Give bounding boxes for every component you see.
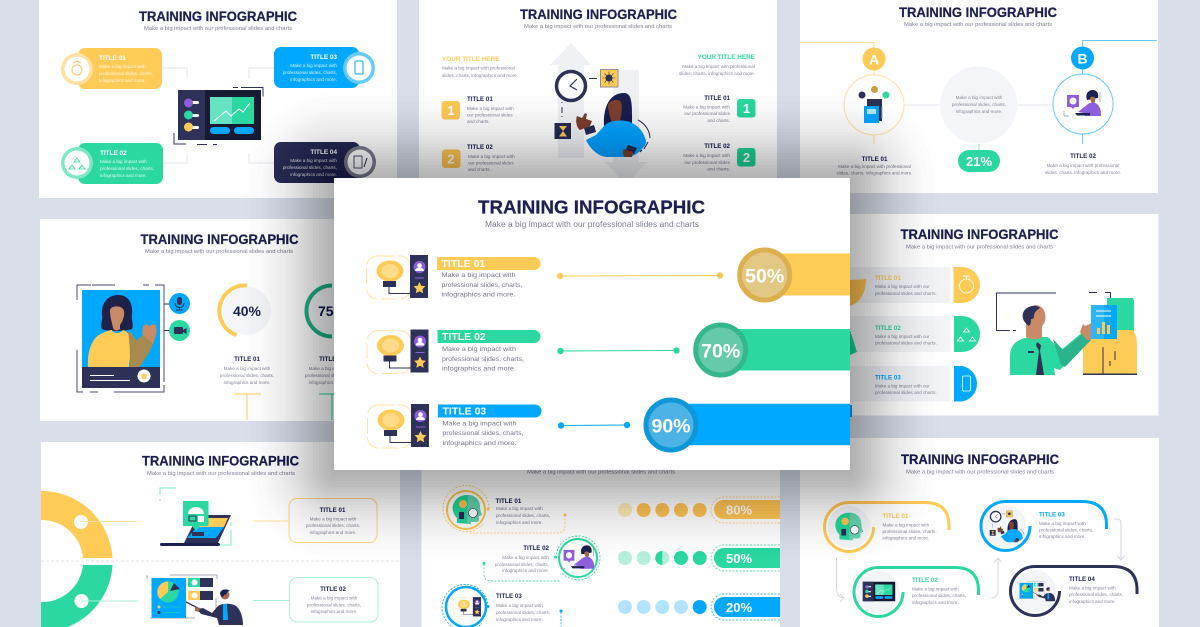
card: title 03: infographics and more.	[1039, 534, 1086, 539]
card: title 03: Make a big impact with	[1039, 521, 1086, 526]
card: title 02: TITLE 02	[912, 577, 938, 584]
row: title 01	[845, 267, 980, 303]
card: title 02: Make a big impact with	[100, 159, 147, 164]
icon: microphone	[164, 293, 190, 314]
subheading: Make a big impact with our professional slides and charts	[904, 22, 1052, 28]
left column: 1	[447, 103, 455, 118]
heading: TRAINING INFOGRAPHIC	[899, 5, 1057, 20]
card: title 01	[824, 502, 949, 552]
subheading: Make a big impact with our professional slides and charts	[524, 24, 672, 30]
subheading: Make a big impact with our professional slides and charts	[527, 470, 675, 476]
text: title 02: TITLE 02	[1070, 153, 1096, 160]
right column: our professional slides	[684, 111, 731, 116]
right column: 2	[743, 150, 750, 165]
heading: TRAINING INFOGRAPHIC	[900, 227, 1059, 242]
heading: TRAINING INFOGRAPHIC	[520, 7, 677, 22]
left column: TITLE 02	[467, 144, 493, 151]
right column: and charts.	[707, 166, 730, 172]
row: title 02: Make a big impact with	[502, 555, 549, 560]
panel: slide process path	[800, 438, 1159, 627]
card: title 03: infographics and more.	[290, 77, 337, 82]
right column: our professional slides	[684, 160, 731, 165]
heading: TRAINING INFOGRAPHIC	[139, 9, 297, 24]
card: title 01	[61, 48, 162, 89]
card: title 01: Make a big impact with	[99, 64, 146, 69]
card: title 01: Make a big impact with	[882, 522, 930, 528]
row: title 01: Make a big impact with	[496, 506, 543, 511]
text: title 02: Make a big impact with professional	[1047, 163, 1119, 168]
row: title 03: infographics and more.	[442, 440, 517, 447]
right column: 1	[743, 101, 750, 116]
node B	[1053, 40, 1157, 144]
heading: TRAINING INFOGRAPHIC	[140, 232, 299, 247]
arrows	[836, 519, 1124, 602]
text: title 01: TITLE 01	[234, 356, 260, 363]
row: title 03: infographics and more.	[496, 617, 543, 622]
illustration: man presenting chart	[996, 292, 1137, 375]
text: title 02: Make a big impact with	[309, 366, 356, 371]
right column: and charts.	[707, 118, 730, 123]
row: title 03: Make a big impact with	[442, 420, 517, 428]
row: title 02: professional slides and charts.	[875, 340, 937, 346]
card: title 01: infographics and more.	[310, 530, 356, 535]
row: title 02: TITLE 02	[442, 331, 486, 343]
heading: TRAINING INFOGRAPHIC	[901, 452, 1059, 467]
row: title 03: professional slides, charts,	[496, 610, 550, 615]
card: title 03: Make a big impact with	[290, 63, 337, 68]
card: title 01	[289, 498, 377, 542]
text: title 01: Make a big impact with	[224, 366, 271, 371]
row: title 02: professional slides, charts,	[442, 356, 524, 363]
panel: slide rating dots	[422, 470, 780, 627]
text: title 01: slides, charts, infographics and more.	[836, 170, 913, 176]
card: title 03	[274, 47, 375, 88]
background arrows	[550, 43, 647, 185]
row: title 01: TITLE 01	[875, 275, 901, 282]
gauge: 40%	[219, 285, 271, 335]
card: title 03: TITLE 03	[310, 54, 337, 61]
card: title 04: Make a big impact with	[1069, 586, 1116, 590]
text: title 02: professional slides, charts,	[305, 373, 359, 378]
right column	[679, 54, 756, 172]
card: title 01: professional slides, charts,	[99, 71, 153, 76]
row: title 01: professional slides and charts.	[875, 291, 937, 296]
left column: Make a big impact with	[467, 106, 514, 111]
right column: TITLE 01	[704, 95, 731, 102]
row: title 01: professional slides, charts,	[442, 282, 523, 289]
node A	[800, 42, 904, 144]
connectors	[81, 520, 288, 522]
row: title 03	[368, 400, 850, 450]
card: title 04: professional slides, charts,	[1069, 592, 1123, 597]
card: title 03: professional slides, charts,	[283, 70, 337, 75]
left column: TITLE 01	[467, 96, 493, 103]
center callout	[940, 66, 1017, 172]
row: title 01: TITLE 01	[442, 258, 485, 270]
right column: TITLE 02	[704, 143, 731, 150]
right column: Make a big impact with	[683, 153, 730, 158]
center callout: professional slides, charts,	[952, 102, 1006, 107]
row: title 02: 50%	[726, 551, 752, 566]
row: title 01	[366, 250, 850, 300]
row: title 02	[482, 536, 780, 581]
row: title 03: 90%	[651, 416, 691, 438]
connector lines	[162, 68, 274, 163]
card: title 02: professional slides, charts,	[100, 166, 154, 171]
card: title 02	[290, 578, 378, 622]
center callout: 21%	[966, 154, 992, 169]
row: title 02	[845, 316, 980, 352]
left column: Make a big impact with	[468, 154, 515, 159]
text: title 01: TITLE 01	[862, 156, 888, 163]
left column: 2	[447, 152, 455, 166]
row: title 01: Make a big impact with our	[875, 284, 930, 289]
right column: YOUR TITLE HERE	[697, 54, 756, 61]
subheading: Make a big impact with our professional slides and charts	[906, 244, 1053, 250]
card: title 02: professional slides, charts,	[307, 602, 361, 608]
row: title 02: infographics and more.	[502, 568, 549, 573]
card: title 01: TITLE 01	[882, 513, 909, 520]
card: title 03: TITLE 03	[1039, 512, 1065, 518]
gauge: 40%: 40%	[233, 303, 262, 319]
row: title 01: 50%	[745, 266, 784, 288]
left column: our professional slides	[467, 112, 513, 118]
right column: Make a big impact with	[683, 104, 730, 110]
card: title 02: infographics and more.	[311, 609, 357, 614]
panel: slide your title here	[419, 0, 777, 185]
subheading: Make a big impact with our professional slides and charts	[144, 26, 292, 32]
card: title 04: professional slides, charts,	[283, 165, 337, 170]
subheading: Make a big impact with our professional slides and charts	[485, 220, 699, 229]
panel: slide donut	[41, 442, 400, 627]
donut chart	[41, 491, 112, 627]
left column	[442, 56, 518, 172]
row: title 02: Make a big impact with	[442, 346, 516, 353]
card: title 02: infographics and more.	[912, 600, 959, 605]
row: title 03: professional slides and charts.	[875, 390, 937, 395]
card: title 03	[981, 502, 1106, 550]
card: title 04: Make a big impact with	[290, 158, 337, 163]
node A: A	[869, 52, 879, 68]
row: title 02: 70%	[701, 340, 740, 362]
left column: slides, charts, infographics and more.	[442, 73, 518, 78]
row: title 01: TITLE 01	[496, 498, 522, 505]
card: title 04: infographics and more.	[290, 172, 337, 177]
text: title 02	[305, 356, 359, 420]
card: title 01: Make a big impact with	[310, 516, 357, 522]
row: title 01	[443, 486, 780, 533]
row: title 01: professional slides, charts,	[496, 513, 550, 518]
connector lines	[904, 104, 1053, 106]
row: title 01: infographics and more.	[442, 292, 516, 298]
card: title 04: TITLE 04	[310, 149, 337, 156]
text: title 01: infographics and more.	[224, 380, 270, 385]
row: title 03: TITLE 03	[442, 406, 486, 418]
card: title 04: TITLE 04	[1069, 576, 1095, 583]
text: title 02	[1045, 153, 1121, 175]
card: title 02	[854, 568, 978, 616]
card: title 02: professional slides, charts,	[912, 593, 966, 598]
text: title 01	[836, 156, 913, 176]
gauge: 75%	[307, 286, 356, 336]
row: title 03: TITLE 03	[496, 593, 522, 600]
row: title 02: Make a big impact with our	[875, 334, 930, 339]
row: title 01: infographics and more.	[496, 520, 543, 525]
card: title 02: Make a big impact with	[912, 586, 959, 592]
panel: slide presenter webcam	[40, 219, 359, 421]
row: title 02: TITLE 02	[523, 545, 550, 552]
panel: slide process cards	[39, 0, 397, 198]
row: title 01: Make a big impact with	[442, 272, 516, 279]
card: title 04: infographics and more.	[1069, 599, 1116, 604]
heading: TRAINING INFOGRAPHIC	[142, 454, 299, 468]
card: title 01: TITLE 01	[320, 507, 346, 514]
text: title 01: Make a big impact with professional	[838, 164, 911, 169]
row: title 03	[442, 585, 780, 627]
text: title 02: slides, charts, infographics and more.	[1045, 170, 1121, 175]
row: title 02: TITLE 02	[875, 325, 901, 332]
panel: slide a b comparison	[800, 0, 1158, 193]
card: title 04	[274, 142, 376, 183]
illustration: woman with clock	[554, 70, 650, 157]
icon: video camera	[164, 320, 190, 341]
card: title 01: professional slides, charts,	[306, 523, 360, 528]
row: title 02: infographics and more.	[442, 366, 516, 372]
left column: Make a big impact with professional	[442, 66, 515, 70]
text: title 01	[220, 356, 274, 420]
left column: YOUR TITLE HERE	[442, 56, 500, 63]
subheading: Make a big impact with our professional slides and charts	[145, 249, 293, 255]
text: title 01: professional slides, charts,	[220, 373, 274, 378]
center slide shadow	[244, 90, 940, 562]
center callout: infographics and more.	[956, 109, 1002, 114]
clipped left donut	[850, 279, 866, 417]
card: title 02: infographics and more.	[100, 173, 147, 178]
center callout: Make a big impact with	[956, 95, 1003, 100]
row: title 03	[845, 366, 977, 402]
card: title 02: Make a big impact with	[311, 596, 358, 600]
panel: slide manager chart	[840, 214, 1158, 417]
illustration: presenter	[147, 575, 243, 625]
subheading: Make a big impact with our professional slides and charts	[906, 470, 1054, 476]
row: title 03: Make a big impact with our	[875, 384, 930, 388]
card: title 01: professional slides, charts,	[882, 529, 937, 534]
card: title 03: professional slides, charts,	[1039, 528, 1093, 532]
row: title 03: professional slides, charts,	[442, 430, 524, 437]
card: title 02: TITLE 02	[320, 586, 346, 593]
text: title 02: TITLE 02	[319, 356, 345, 363]
row: title 02: professional slides, charts,	[495, 562, 549, 567]
row: title 03: TITLE 03	[875, 374, 901, 382]
left column: and charts.	[467, 119, 490, 124]
row: title 03: 20%	[726, 600, 752, 615]
card: title 01: infographics and more.	[99, 78, 146, 83]
card: title 02	[61, 143, 163, 184]
row: title 02	[367, 325, 850, 375]
left column: and charts.	[468, 167, 491, 172]
gauge: 75%: 75%	[318, 303, 347, 319]
card: title 01: infographics and more.	[882, 536, 929, 540]
row: title 03: Make a big impact with	[496, 603, 543, 608]
right column: Make a big impact with professional	[682, 64, 755, 69]
card: title 02: TITLE 02	[100, 150, 127, 157]
heading: TRAINING INFOGRAPHIC	[478, 196, 705, 218]
icon: dashboard monitor	[174, 88, 263, 144]
row: title 01: 80%	[726, 502, 752, 518]
right column: slides, charts, infographics and more.	[679, 71, 755, 76]
left column: our professional slides	[468, 160, 514, 166]
panel: main slide	[334, 178, 850, 470]
illustration: laptop	[160, 488, 231, 546]
divider	[41, 560, 400, 562]
card: title 04	[1010, 566, 1137, 616]
node B: B	[1077, 50, 1088, 66]
illustration: video call woman	[77, 285, 164, 392]
subheading: Make a big impact with our professional slides and charts	[147, 471, 295, 477]
text: title 02: infographics and more.	[309, 380, 355, 385]
card: title 01: TITLE 01	[99, 55, 126, 62]
